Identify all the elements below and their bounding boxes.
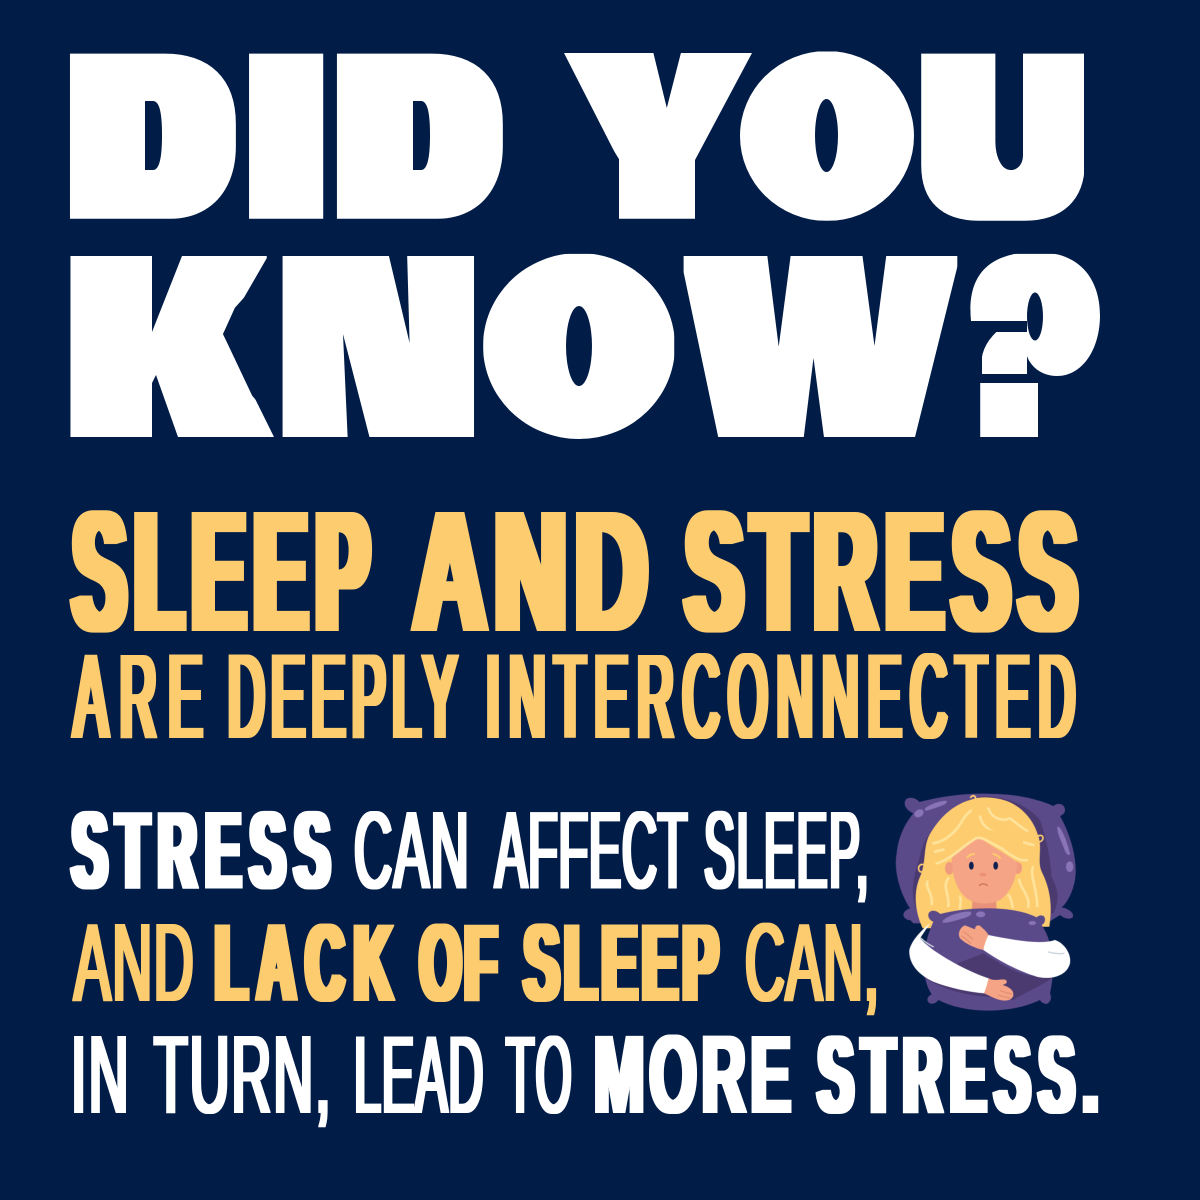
subheading: are deeply interconnected: ARE bbox=[74, 629, 202, 764]
curls bbox=[919, 796, 1043, 872]
title line two: KN bbox=[78, 212, 467, 491]
icon: worried woman hugging pillow bbox=[896, 794, 1076, 1011]
body line three: IN bbox=[71, 1014, 128, 1137]
ears bbox=[945, 861, 1022, 875]
title: did you know bbox=[60, 13, 1135, 491]
body line one: CAN bbox=[354, 790, 469, 912]
face bbox=[952, 837, 1017, 904]
body line three bbox=[71, 1013, 1098, 1137]
hair strands bbox=[927, 808, 1037, 908]
finger lines bbox=[962, 932, 1012, 998]
subheading: are deeply interconnected: INTERCONNECTED bbox=[486, 629, 1075, 764]
body line two: OF bbox=[420, 902, 497, 1025]
body text block bbox=[71, 789, 1098, 1137]
subheading: sleep and stress: STRESS bbox=[686, 475, 1076, 667]
upper hand bbox=[959, 925, 988, 950]
lower hand bbox=[984, 978, 1013, 1001]
fringe strand bbox=[937, 838, 1027, 863]
subheading: are deeply interconnected bbox=[74, 629, 1075, 764]
body line two: AND bbox=[74, 902, 194, 1025]
back pillow bbox=[896, 794, 1076, 923]
body line two: LACK bbox=[215, 902, 392, 1025]
subheading: are deeply interconnected: DEEPLY bbox=[228, 629, 457, 764]
body line two bbox=[74, 902, 879, 1025]
pillow shadow bbox=[913, 796, 1058, 913]
pillow highlights bbox=[913, 801, 1073, 872]
body line three: LEAD bbox=[354, 1014, 483, 1137]
front pillow bbox=[924, 908, 1053, 1011]
body line two: SLEEP bbox=[524, 902, 718, 1025]
facial features bbox=[967, 854, 1000, 886]
body line two: CAN, bbox=[745, 902, 879, 1025]
title line two bbox=[78, 212, 1086, 491]
body line one: SLEEP, bbox=[704, 789, 869, 911]
body line one: AFFECT bbox=[495, 790, 687, 913]
front pillow highlights bbox=[943, 911, 1036, 925]
title line two: W bbox=[704, 212, 937, 491]
title line two: O bbox=[502, 220, 656, 472]
hair bbox=[916, 797, 1051, 928]
body line three: TO bbox=[506, 1013, 572, 1136]
title line two: ? bbox=[964, 220, 1086, 472]
subheading: sleep and stress: AND bbox=[414, 475, 647, 667]
body line three: MORE bbox=[594, 1013, 791, 1136]
lower arm sleeve bbox=[909, 923, 989, 993]
body line one bbox=[72, 789, 869, 913]
sleeve folds bbox=[921, 938, 1064, 954]
subheading: sleep and stress: SLEEP bbox=[73, 476, 369, 668]
body line three: STRESS. bbox=[818, 1014, 1098, 1137]
title line one bbox=[80, 13, 1074, 268]
upper arm sleeve bbox=[983, 935, 1070, 978]
title line one: Y bbox=[584, 13, 739, 268]
pillow crease shadow bbox=[923, 953, 1053, 1000]
subheading: sleep and stress bbox=[73, 475, 1076, 668]
neck bbox=[972, 897, 997, 912]
body line three: TURN, bbox=[154, 1014, 330, 1137]
body line one: STRESS bbox=[72, 790, 330, 912]
fringe over face bbox=[943, 823, 1023, 863]
title line one: OU bbox=[750, 19, 1074, 252]
title line one: DID bbox=[80, 19, 488, 252]
